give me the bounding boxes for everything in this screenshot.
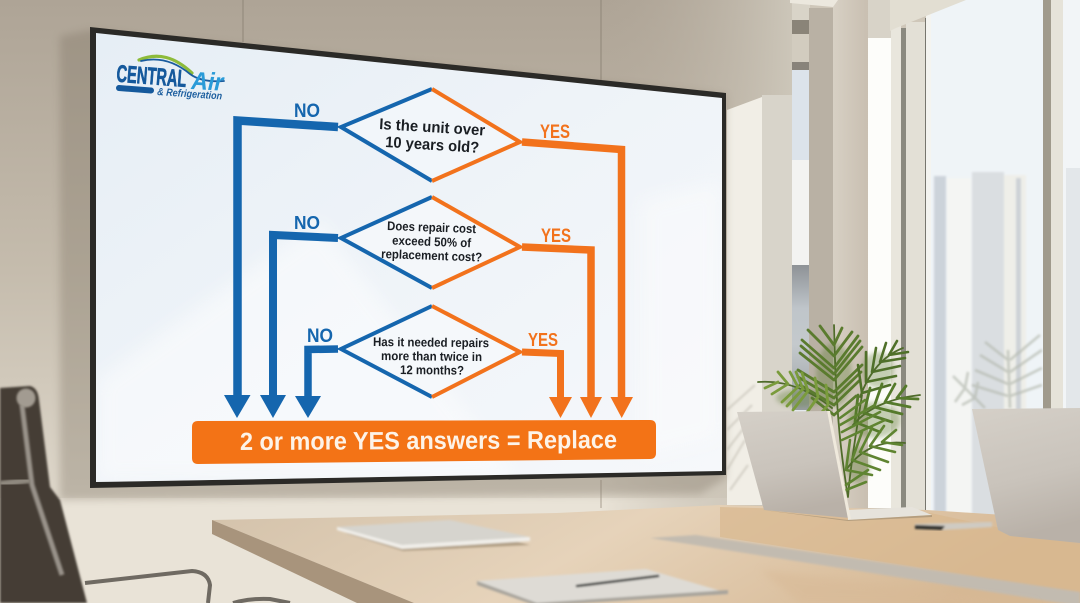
YES path 3	[522, 352, 572, 418]
smartphone	[915, 522, 992, 530]
plant reflection in window	[953, 335, 1042, 408]
chair back	[0, 386, 87, 603]
chair metal frame	[22, 405, 62, 575]
plant shadow on wall	[727, 385, 755, 490]
question 3 text: Has it needed repairs	[373, 335, 489, 350]
question 2 text	[381, 219, 482, 265]
logo wordmark CENTRAL: CENTRAL	[116, 61, 187, 93]
window and column architecture	[790, 0, 1080, 520]
NO path 3	[295, 349, 338, 418]
result banner	[192, 420, 656, 464]
decision diamond 2	[338, 195, 522, 290]
question 3 text: 12 months?	[400, 363, 464, 378]
foreground laptop	[972, 408, 1080, 543]
YES path 1	[522, 142, 633, 418]
NO label 2: NO	[294, 212, 320, 233]
YES label 3: YES	[528, 329, 558, 350]
table edge	[212, 520, 414, 603]
chair knob	[16, 388, 36, 408]
NO path 2	[260, 235, 338, 418]
wall-mounted screen	[90, 27, 726, 488]
logo bar	[119, 88, 151, 90]
result text: 2 or more YES answers = Replace	[240, 426, 617, 456]
screen reflections	[102, 246, 516, 482]
question 2 text: Does repair cost	[387, 219, 477, 236]
question 3 text	[373, 335, 489, 378]
closed laptop on table	[337, 520, 530, 551]
left frond leaves	[765, 372, 828, 420]
notepad and pen	[477, 569, 728, 603]
YES label 1: YES	[540, 122, 570, 143]
question 1 text: 10 years old?	[385, 134, 480, 157]
question 2 text: replacement cost?	[381, 247, 482, 265]
question 1 text: Is the unit over	[379, 116, 486, 139]
plant stems	[758, 325, 920, 497]
office chair	[0, 386, 290, 603]
decision diamond 3	[338, 304, 522, 399]
table back shadow band	[720, 507, 1080, 592]
chair crossbar	[0, 480, 30, 484]
YES label 2: YES	[541, 226, 571, 247]
potted palm plant	[758, 325, 920, 497]
table runner strip	[650, 535, 1080, 603]
decision diamond 1	[338, 87, 522, 183]
screen frame	[90, 27, 726, 488]
conference table	[212, 505, 1080, 603]
NO path 1	[224, 120, 338, 418]
logo: Central Air and Refrigeration	[116, 56, 225, 103]
upper right frond leaves	[858, 341, 908, 393]
flowchart	[192, 87, 656, 464]
question 3 text: more than twice in	[381, 349, 482, 364]
table lower wood	[760, 570, 1040, 603]
screen display	[96, 33, 722, 482]
table top	[212, 505, 1080, 603]
logo swoosh	[139, 56, 224, 81]
top frond leaves	[798, 326, 862, 415]
pen	[577, 576, 658, 586]
question 2 text: exceed 50% of	[392, 234, 472, 250]
chair armrest	[85, 571, 290, 603]
NO label 1: NO	[294, 101, 320, 122]
wall background	[0, 0, 800, 603]
screen drop shadow	[60, 30, 726, 500]
logo wordmark Air: Air	[190, 67, 225, 97]
YES path 2	[522, 247, 602, 418]
plant foliage mass	[776, 343, 900, 483]
open laptop	[737, 411, 932, 521]
NO label 3: NO	[307, 326, 333, 347]
right frond leaves	[855, 384, 918, 432]
question 1 text	[379, 116, 486, 157]
logo tagline: & Refrigeration	[157, 86, 222, 103]
lower frond leaves	[840, 400, 902, 490]
